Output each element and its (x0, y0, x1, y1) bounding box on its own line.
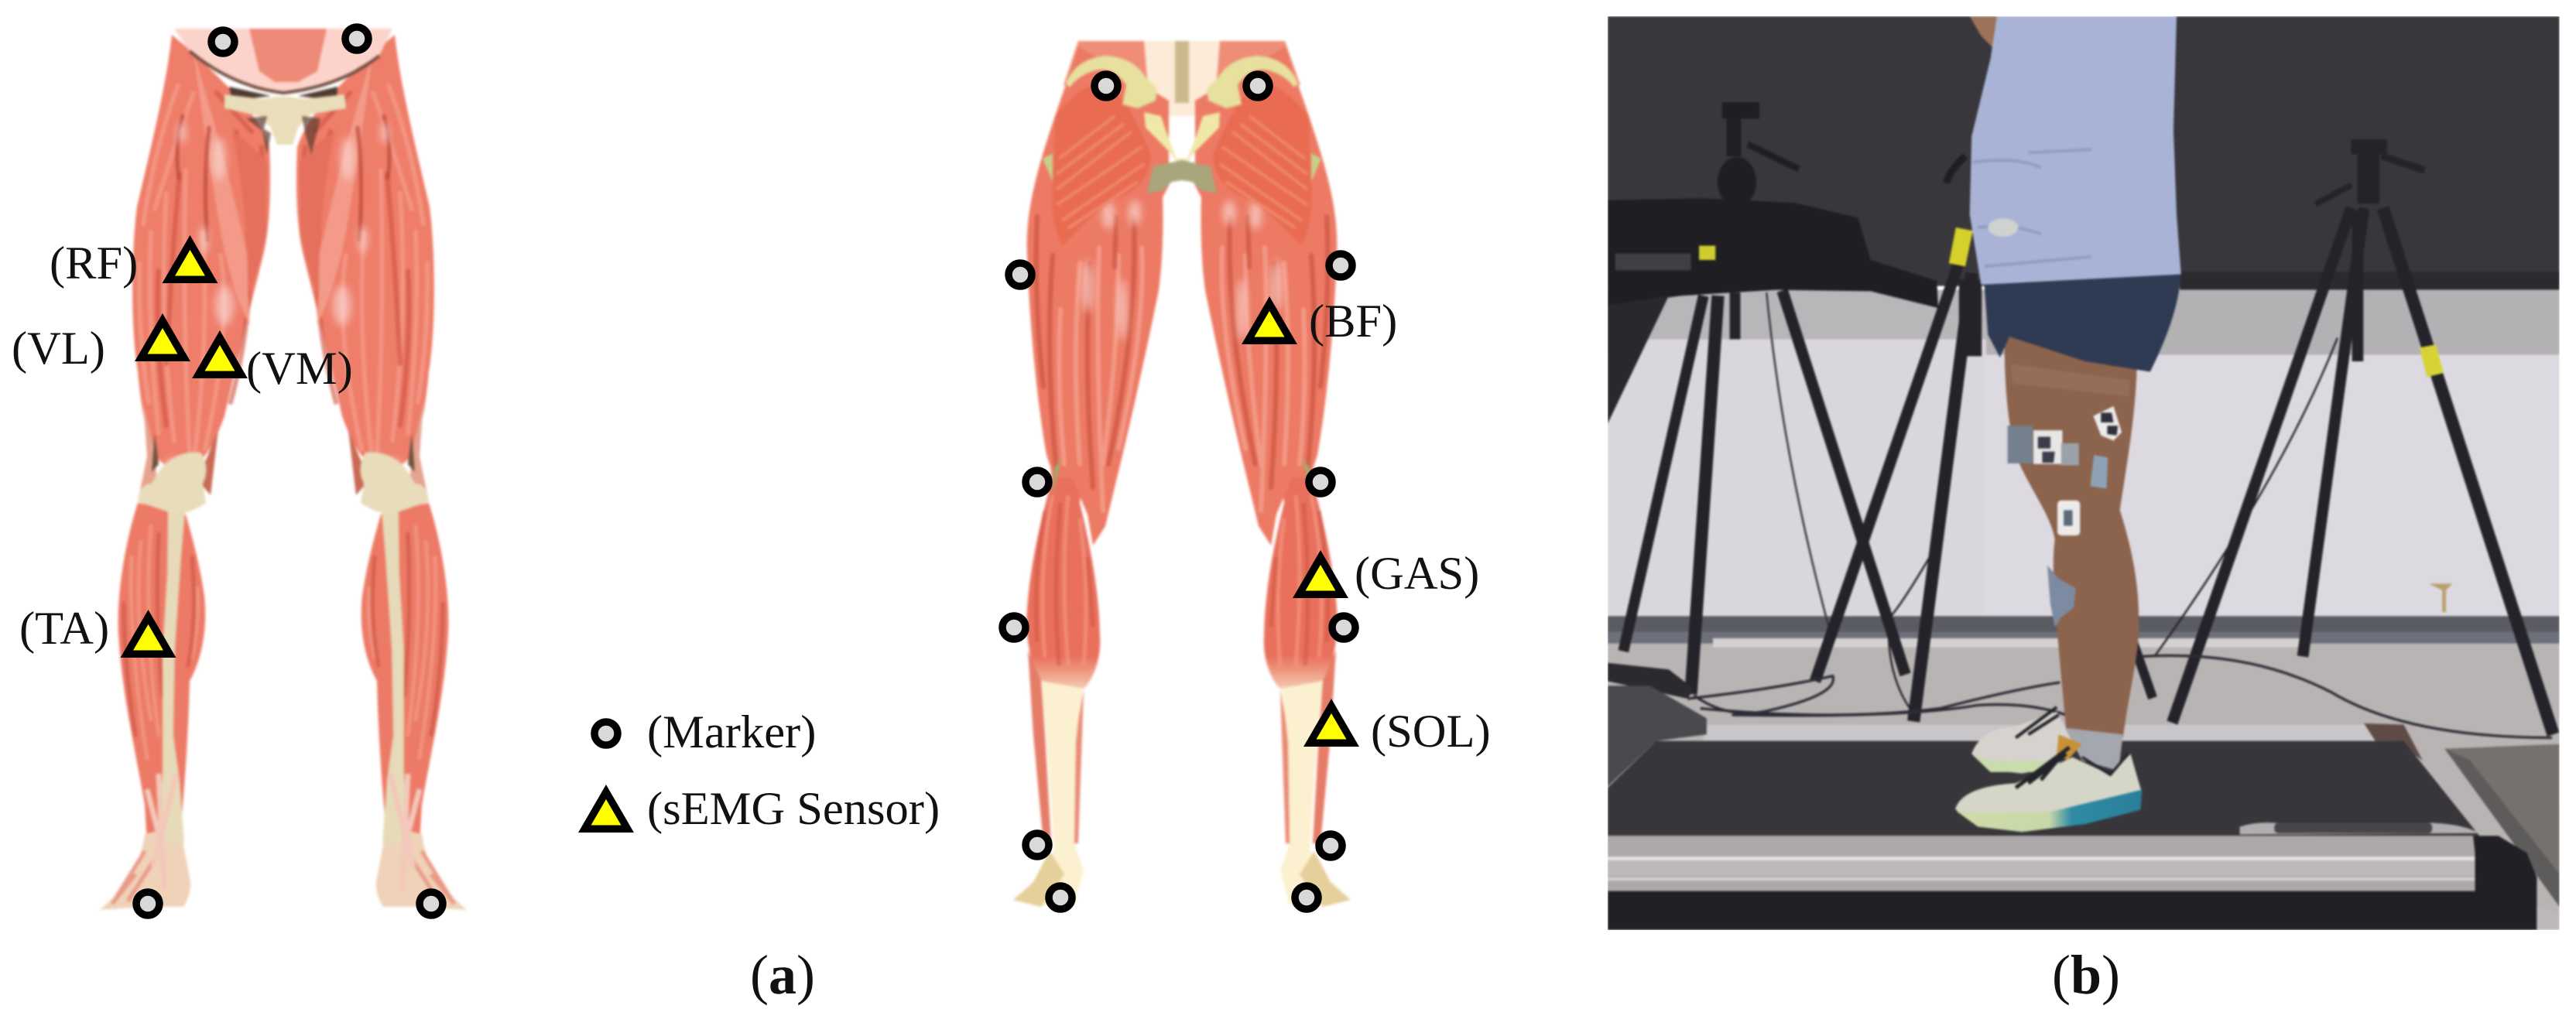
person shorts (1984, 273, 2181, 371)
treadmill belt (1608, 741, 2479, 836)
rear thigh and outer muscle (1027, 46, 1169, 545)
label: SOL: (SOL) (1371, 706, 1491, 757)
front left leg (100, 35, 270, 910)
white wall (1608, 339, 1986, 619)
floor cables (1687, 655, 2552, 737)
legend label: Marker: (Marker) (647, 706, 816, 758)
far shoe sole (1973, 755, 2057, 772)
sEMG sensor triangles (127, 243, 1353, 829)
panel a: rear view of leg muscles (1013, 41, 1351, 907)
leg shading (2011, 364, 2129, 396)
thigh fibres (139, 53, 267, 456)
near shoe upper (1955, 754, 2142, 822)
belt logo (2240, 822, 2479, 835)
caption b: (b) (2052, 944, 2120, 1006)
caption a: (a) (750, 944, 815, 1006)
inner calf strip (1074, 689, 1084, 843)
waist sensor (1988, 218, 2018, 237)
foot edge (1013, 851, 1064, 907)
far shoe laces (2016, 707, 2059, 737)
treadmill front end (2470, 836, 2537, 930)
calf (1026, 456, 1100, 689)
rear right leg, mirrored (1195, 46, 1351, 907)
person arm (1970, 16, 1998, 49)
triangle SOL (1310, 706, 1353, 743)
front right leg, mirrored (296, 35, 467, 910)
triangle VL (141, 320, 184, 357)
person shirt (1970, 16, 2181, 285)
rear left leg (1013, 46, 1169, 907)
sock (2065, 728, 2123, 771)
muscle highlights (163, 122, 234, 477)
triangle RF (169, 243, 211, 279)
back of knee (1053, 456, 1062, 495)
left tripod head (1718, 103, 1799, 207)
front silver rail (1608, 836, 2475, 891)
iliac crest (1066, 56, 1157, 108)
label: TA: (TA) (19, 603, 109, 655)
right step panel (2445, 743, 2560, 874)
centre tripod knob (1947, 156, 1965, 183)
knee bones (138, 452, 207, 514)
floor strip (1608, 644, 2560, 930)
electrode calf (2047, 566, 2076, 627)
centre tripod tag (1949, 227, 1973, 266)
foot tendons (112, 851, 155, 904)
inner thigh shadows (246, 116, 320, 155)
right tripod yellow tag (2420, 344, 2444, 377)
electrode side sensor (2090, 455, 2108, 489)
thigh muscle (132, 35, 270, 468)
calf fibres (1043, 495, 1086, 665)
lower leg fibres (124, 526, 198, 758)
treadmill end cap (2364, 723, 2423, 761)
electrode strip (2008, 426, 2033, 463)
gluteus fibres (1057, 116, 1144, 228)
label: BF: (BF) (1309, 296, 1397, 347)
label: VL: (VL) (12, 323, 105, 374)
legend label: sEMG Sensor: (sEMG Sensor) (647, 783, 940, 835)
label: GAS: (GAS) (1355, 548, 1479, 600)
ankle tag (2057, 734, 2082, 761)
skirting band (1607, 614, 2560, 634)
knee side tissue (138, 402, 159, 511)
pubic bone (224, 94, 346, 145)
hamstring highlights (1082, 200, 1141, 340)
triangle GAS (1299, 557, 1342, 594)
pelvic floor (1147, 160, 1217, 193)
near shoe laces (2016, 747, 2069, 788)
board ledge (2180, 272, 2560, 290)
pelvis skin (174, 29, 392, 93)
centre tripod legs (1815, 254, 2153, 721)
triangle TA (127, 617, 170, 654)
pelvic shadow (190, 51, 379, 93)
arch highlight (1615, 254, 1690, 270)
far shoe (1971, 712, 2073, 774)
left tripod legs (1623, 290, 1906, 694)
motion capture markers (136, 27, 1355, 915)
hip bone tip (1043, 153, 1053, 182)
sacrum (1144, 112, 1220, 164)
spine (1144, 41, 1220, 116)
tibia (159, 503, 186, 843)
triangle VM (198, 337, 242, 374)
wall fixture (2429, 583, 2452, 612)
treadmill base (1608, 891, 2537, 930)
back treadmill rail (1704, 725, 2376, 741)
floor device (1608, 663, 1694, 699)
triangle BF (1248, 303, 1291, 340)
left side cushion (1608, 686, 1707, 786)
left exercise machine arch (1608, 198, 1938, 308)
label: VM: (VM) (246, 343, 353, 395)
electrode knee patch (2057, 501, 2080, 535)
left dark support (1608, 296, 1669, 424)
shoe collar edge (2082, 754, 2128, 775)
label: RF: (RF) (50, 238, 138, 289)
peroneal strip (1028, 650, 1051, 843)
foot (100, 826, 190, 910)
right tripod legs (2155, 208, 2554, 734)
electrode top thigh (2093, 406, 2122, 441)
bottom corner wedge (2537, 907, 2560, 930)
panel a: front view of leg muscles (100, 29, 467, 910)
achilles and heel (1037, 681, 1084, 905)
lower leg muscle (118, 503, 205, 843)
near shoe sole (1957, 790, 2142, 832)
vertebrae (1175, 41, 1189, 103)
person leg (2005, 331, 2139, 737)
abdominal muscle (249, 29, 327, 82)
arch tag (1699, 246, 1715, 260)
torso top tissue (1064, 41, 1300, 85)
hamstring fibres (1036, 217, 1142, 511)
gluteus (1053, 83, 1151, 245)
ankle tendons (147, 774, 176, 890)
shaded wall band (1985, 289, 2560, 356)
shirt creases (1973, 149, 2091, 266)
panel b: treadmill photo (1608, 16, 2560, 930)
right tripod head (2315, 140, 2424, 204)
upper blackboard wall (1608, 16, 2560, 286)
legend triangle (584, 792, 628, 829)
